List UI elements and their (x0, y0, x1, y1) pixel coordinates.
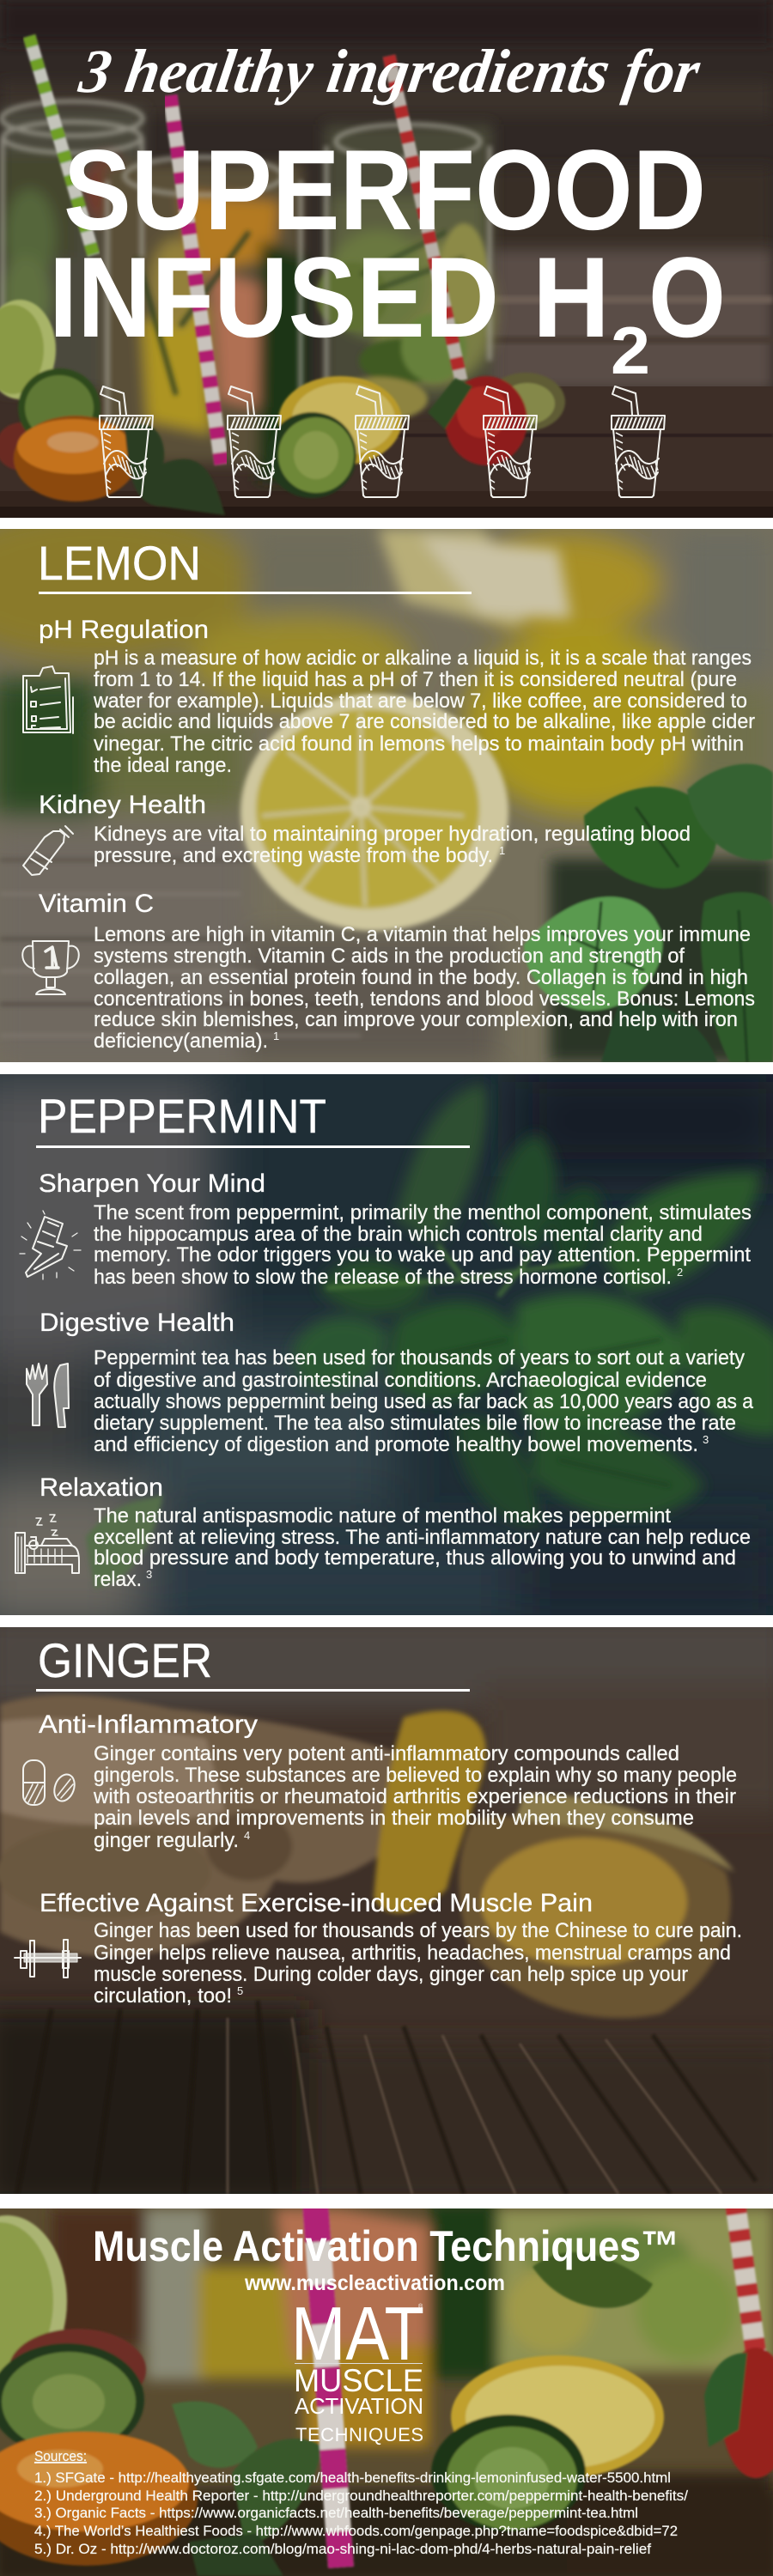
title: INFUSED H2O: INFUSED (49, 234, 499, 361)
title: INFUSED H2O: O (648, 234, 726, 361)
logo: MAT Muscle Activation Techniques: TECHNIQUES (295, 2424, 423, 2445)
body text: Anti-Inflammatory: gingerols. These substances are believed to explain why so many people (94, 1764, 737, 1787)
lemon background photo (0, 507, 773, 1069)
panel: lemon (0, 507, 773, 1069)
straw: green striped (29, 36, 94, 255)
icon: barbell (15, 1940, 81, 1978)
panel: footer (0, 2202, 773, 2576)
body text: Digestive Health: dietary supplement. The tea also stimulates bile flow to increase the rate (94, 1412, 736, 1435)
icon: trophy (22, 941, 79, 994)
sources list: 1.) SFGate - http://healthyeating.sfgate.com/health-benefits-drinking-lemoninfused-water-5500.html (34, 2470, 671, 2486)
footer title: Muscle Activation Techniques: Muscle Activation Techniques™ (93, 2222, 679, 2270)
body text: Digestive Health (94, 1346, 754, 1456)
icon: fork and knife (27, 1364, 69, 1427)
title line: 3 healthy ingredients for: 3 healthy ingredients for (75, 36, 705, 106)
sources heading: Sources: (34, 2448, 87, 2464)
body text: Digestive Health: and efficiency of digestion and promote healthy bowel movements. (94, 1433, 698, 1456)
ginger background photo (0, 1614, 773, 2207)
body text: Effective Against Exercise-induced Muscle Pain: 5 (237, 1984, 243, 1997)
body text: Vitamin C: reduce skin blemishes, can improve your complexion, and help with iron (94, 1008, 738, 1031)
body text: Relaxation: 3 (146, 1568, 152, 1581)
logo: MAT Muscle Activation Techniques: MUSCLE (294, 2363, 423, 2398)
body text: Sharpen Your Mind: has been show to slow the release of the stress hormone cortisol. (94, 1266, 672, 1289)
body text: Effective Against Exercise-induced Muscle Pain: circulation, too! (94, 1984, 232, 2008)
body text: Relaxation: The natural antispasmodic nature of menthol makes peppermint (94, 1504, 671, 1528)
body text: Anti-Inflammatory: pain levels and improvements in their mobility when they consume (94, 1807, 694, 1830)
title: INFUSED H2O (49, 234, 726, 388)
body text: Vitamin C: concentrations in bones, teeth, tendons and blood vessels. Bonus: Lemons (94, 987, 755, 1011)
section heading: LEMON: LEMON (38, 536, 201, 590)
heading underline (36, 1145, 470, 1148)
heading underline (36, 1689, 470, 1692)
title: INFUSED H2O: 2 (611, 313, 650, 388)
subheading: Kidney Health: Kidney Health (39, 791, 206, 819)
body text: Kidney Health: pressure, and excreting waste from the body. (94, 844, 493, 867)
body text: Vitamin C: collagen, an essential protein found in the body. Collagen is found in high (94, 966, 748, 989)
body text: Sharpen Your Mind: 2 (677, 1266, 683, 1279)
panel: header (0, 0, 773, 518)
peppermint background photo (0, 1065, 773, 1631)
subheading: pH Regulation: pH Regulation (39, 616, 209, 644)
panel: ginger (0, 1614, 773, 2207)
body text: Vitamin C: Lemons are high in vitamin C, a vitamin that helps improves your immune (94, 923, 751, 946)
body text: Digestive Health: actually shows peppermint being used as far back as 10,000 years ago as a (94, 1390, 754, 1413)
sources list (34, 2470, 688, 2557)
icon: water bottle (23, 826, 73, 875)
body text: Sharpen Your Mind (94, 1201, 752, 1289)
body text: Anti-Inflammatory: 4 (244, 1829, 250, 1842)
body text: pH Regulation: the ideal range. (94, 754, 232, 777)
section heading: GINGER: GINGER (38, 1633, 212, 1687)
body text: pH Regulation: pH is a measure of how acidic or alkaline a liquid is, it is a scale that ranges (94, 647, 752, 670)
icon: bed with zzz (15, 1515, 79, 1573)
body text: Sharpen Your Mind: the hippocampus area of the brain which controls mental clarity and (94, 1223, 703, 1246)
header background photo: infused water jars and fruit (0, 0, 773, 518)
body text: Digestive Health: of digestive and gastrointestinal conditions. Archaeological evidence (94, 1369, 707, 1392)
subheading: Digestive Health: Digestive Health (40, 1309, 234, 1337)
icon row: five sketched drink cups (100, 386, 665, 497)
body text: Anti-Inflammatory: Ginger contains very potent anti-inflammatory compounds called (94, 1742, 679, 1765)
straw: red striped (389, 56, 461, 380)
body text: Anti-Inflammatory: with osteoarthritis or rheumatoid arthritis experience reductions in their (93, 1785, 736, 1808)
heading underline (39, 592, 472, 594)
logo: MAT Muscle Activation Techniques: MAT (291, 2291, 424, 2376)
icon: pills (23, 1760, 78, 1805)
body text: Effective Against Exercise-induced Muscle Pain: Ginger has been used for thousands of years by the Chinese to cure pain. (94, 1919, 742, 1942)
logo: MAT Muscle Activation Techniques (291, 2291, 424, 2445)
subheading: Effective Against Exercise-induced Muscle Pain: Effective Against Exercise-induced Muscle Pain (40, 1889, 593, 1917)
subheading: Relaxation: Relaxation (40, 1473, 163, 1502)
body text: pH Regulation: be acidic and liquids above 7 are considered to be alkaline, like apple cider (94, 710, 755, 733)
body text: Anti-Inflammatory: ginger regularly. (94, 1829, 239, 1852)
body text: pH Regulation: from 1 to 14. If the liquid has a pH of 7 then it is considered neutral (pure (94, 668, 737, 691)
body text: Vitamin C: systems strength. Vitamin C aids in the production and strength of (94, 945, 685, 968)
subheading: Anti-Inflammatory: Anti-Inflammatory (39, 1710, 258, 1739)
body text: Relaxation: blood pressure and body temperature, thus allowing you to unwind and (94, 1546, 736, 1570)
body text: Digestive Health: Peppermint tea has been used for thousands of years to sort out a variety (94, 1346, 745, 1370)
sources list: 5.) Dr. Oz - http://www.doctoroz.com/blog/mao-shing-ni-lac-dom-phd/4-herbs-natural-pain-relief (34, 2541, 651, 2557)
footer website: www.muscleactivation.com (244, 2271, 505, 2295)
body text: Digestive Health: 3 (703, 1433, 709, 1446)
body text: Vitamin C: deficiency(anemia). (94, 1030, 268, 1053)
body text: Kidney Health: 1 (499, 844, 505, 857)
icon: clipboard checklist (23, 666, 73, 733)
logo: MAT Muscle Activation Techniques: ACTIVATION (295, 2393, 423, 2419)
body text: Effective Against Exercise-induced Muscle Pain (94, 1919, 742, 2008)
footer background photo (0, 2202, 773, 2576)
straw: pink striped (170, 95, 222, 465)
body text: pH Regulation (93, 647, 755, 777)
sources list: 3.) Organic Facts - https://www.organicfacts.net/health-benefits/beverage/peppermint-tea.html (34, 2505, 638, 2521)
panel: peppermint (0, 1065, 773, 1631)
body text: Relaxation: excellent at relieving stress. The anti-inflammatory nature can help reduce (94, 1526, 751, 1549)
body text: Sharpen Your Mind: The scent from peppermint, primarily the menthol component, stimulates (94, 1201, 752, 1224)
icon: lightning bolt (20, 1211, 81, 1279)
sources list: 4.) The World’s Healthiest Foods - http://www.whfoods.com/genpage.php?tname=foodspice&dbid=72 (34, 2523, 678, 2539)
body text: Vitamin C: 1 (273, 1030, 279, 1042)
subheading: Sharpen Your Mind: Sharpen Your Mind (39, 1170, 265, 1198)
body text: Vitamin C (94, 923, 755, 1053)
title: INFUSED H2O: H (533, 234, 610, 361)
body text: Kidney Health (94, 823, 691, 867)
body text: pH Regulation: water for example). Liquids that are below 7, like coffee, are considered to (93, 690, 747, 713)
body text: Effective Against Exercise-induced Muscle Pain: Ginger helps relieve nausea, arthritis, headaches, menstrual cramps and (94, 1941, 731, 1965)
body text: Anti-Inflammatory (93, 1742, 737, 1852)
body text: Relaxation: relax. (94, 1568, 142, 1591)
body text: Kidney Health: Kidneys are vital to maintaining proper hydration, regulating blood (94, 823, 691, 846)
title: SUPERFOOD: SUPERFOOD (64, 127, 706, 254)
body text: Relaxation (94, 1504, 751, 1591)
body text: pH Regulation: vinegar. The citric acid found in lemons helps to maintain body pH within (94, 732, 744, 756)
section heading: PEPPERMINT: PEPPERMINT (38, 1089, 326, 1143)
sources list: 2.) Underground Health Reporter - http://undergroundhealthreporter.com/peppermint-health-benefits/ (34, 2488, 688, 2504)
body text: Effective Against Exercise-induced Muscle Pain: muscle soreness. During colder days, ginger can help spice up your (94, 1963, 688, 1986)
body text: Sharpen Your Mind: memory. The odor triggers you to wake up and pay attention. Peppermint (94, 1243, 751, 1267)
logo: MAT Muscle Activation Techniques: ® (418, 2303, 423, 2310)
subheading: Vitamin C: Vitamin C (39, 890, 154, 918)
